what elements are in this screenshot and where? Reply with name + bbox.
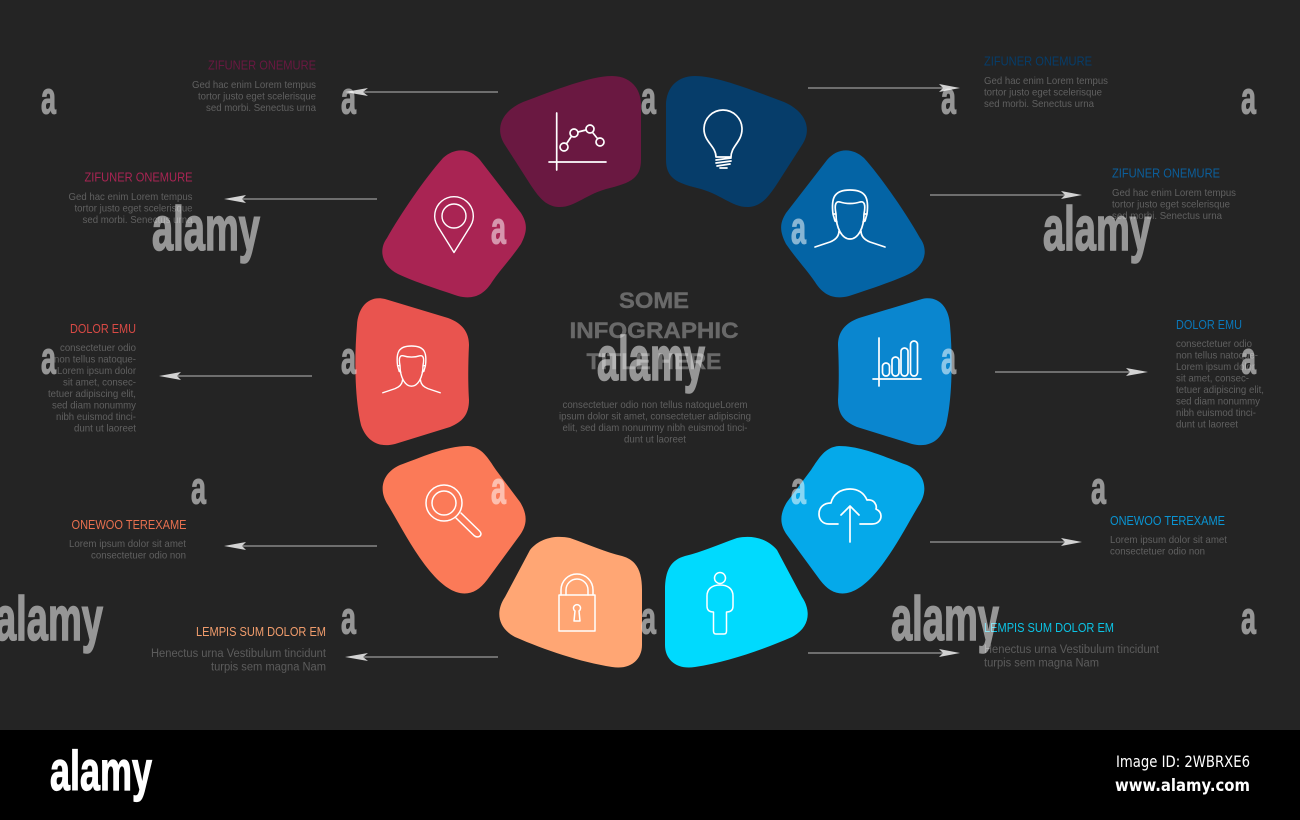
watermarks: small a: a [1241, 592, 1257, 644]
arrow: azure [995, 368, 1148, 376]
icon: bar chart [873, 338, 921, 386]
watermarks: small a: a [1241, 72, 1257, 124]
text block: navy: tortor justo eget scelerisque [984, 86, 1102, 98]
text block: azure: tetuer adipiscing elit, [1176, 384, 1264, 396]
text block: blue [1112, 166, 1236, 222]
watermarks: small a: a [341, 592, 357, 644]
text block: crimson [68, 170, 193, 226]
text block: azure: sed diam nonummy [1176, 396, 1261, 408]
icon: padlock [559, 574, 595, 631]
text block: navy [984, 54, 1108, 110]
text block: red: sit amet, consec- [63, 376, 136, 388]
title: INFOGRAPHIC [570, 318, 738, 343]
text block: red: non tellus natoque- [54, 354, 136, 366]
text block: azure: DOLOR EMU [1176, 318, 1242, 332]
text block: crimson: tortor justo eget scelerisque [74, 202, 193, 214]
text block: cyan: turpis sem magna Nam [984, 658, 1099, 670]
arrow: crimson [224, 195, 377, 203]
text block: red: nibh euismod tinci- [56, 411, 136, 423]
arrow: blue [930, 191, 1082, 199]
text block: sky blue [1110, 514, 1227, 558]
arrow: peach [345, 653, 498, 661]
text block: purple: Ged hac enim Lorem tempus [192, 79, 316, 91]
text block: azure: nibh euismod tinci- [1176, 407, 1256, 419]
icon: line chart [549, 113, 606, 170]
text block: peach: Henectus urna Vestibulum tincidunt [151, 648, 327, 660]
segment: azure bar chart [838, 298, 952, 445]
watermarks: small a: a [41, 72, 57, 124]
watermarks: small a: a [1241, 332, 1257, 384]
watermarks: large alamy: alamy [597, 325, 705, 394]
watermarks: small a: a [191, 462, 207, 514]
text block: peach: LEMPIS SUM DOLOR EM [196, 625, 326, 639]
segment: sky blue cloud [781, 446, 924, 594]
watermarks: large alamy [0, 195, 1151, 654]
text block: azure [1176, 318, 1264, 430]
watermarks: large alamy: alamy [1043, 195, 1151, 264]
center description: ipsum dolor sit amet, consectetuer adipiscing [559, 410, 751, 422]
watermarks: small a: a [491, 202, 507, 254]
text block: crimson: Ged hac enim Lorem tempus [68, 191, 192, 203]
text block: red [48, 322, 137, 434]
text block: crimson: sed morbi. Senectus urna [82, 214, 193, 226]
watermarks: large alamy: alamy [891, 585, 999, 654]
text block: azure: non tellus natoque- [1176, 350, 1258, 362]
watermarks: small a: a [491, 462, 507, 514]
arrow: purple [345, 88, 498, 96]
text block: purple: ZIFUNER ONEMURE [208, 58, 316, 72]
text block: peach: turpis sem magna Nam [211, 662, 326, 674]
title: TITLE HERE [586, 349, 722, 374]
icon: cloud upload [819, 489, 881, 542]
watermarks: small a: a [791, 462, 807, 514]
watermarks: small a: a [341, 72, 357, 124]
segment: cyan person [665, 537, 808, 668]
watermarks: small a [41, 72, 1257, 644]
text block: blue: Ged hac enim Lorem tempus [1112, 187, 1236, 199]
text block: red: Lorem ipsum dolor [57, 365, 136, 377]
text block: coral: ONEWOO TEREXAME [72, 518, 186, 532]
icon: man portrait [383, 346, 440, 393]
text block: red: dunt ut laoreet [74, 422, 136, 434]
text block: azure: sit amet, consec- [1176, 372, 1249, 384]
arrow: red [159, 372, 312, 380]
watermarks: small a: a [641, 72, 657, 124]
text block: cyan: Henectus urna Vestibulum tincidunt [984, 644, 1160, 656]
text block: coral [69, 518, 186, 562]
watermarks: small a: a [791, 202, 807, 254]
text block: sky blue: Lorem ipsum dolor sit amet [1110, 534, 1227, 546]
segment: red profile [355, 298, 469, 445]
center description: consectetuer odio non tellus natoqueLorem [562, 399, 748, 411]
text block: crimson: ZIFUNER ONEMURE [84, 170, 192, 184]
text block: coral: consectetuer odio non [91, 550, 186, 562]
text block: navy: ZIFUNER ONEMURE [984, 54, 1092, 68]
arrow: cyan [808, 649, 960, 657]
text block: cyan: LEMPIS SUM DOLOR EM [984, 621, 1114, 635]
text block: red: tetuer adipiscing elit, [48, 388, 136, 400]
icon: light bulb [704, 110, 742, 168]
watermarks: small a: a [941, 332, 957, 384]
watermarks: small a: a [41, 332, 57, 384]
watermarks: small a: a [341, 332, 357, 384]
text block: purple [192, 58, 316, 114]
watermarks: large alamy: alamy [152, 195, 260, 264]
watermarks: small a: a [1091, 462, 1107, 514]
text block: red: DOLOR EMU [70, 322, 136, 336]
text block: blue: ZIFUNER ONEMURE [1112, 166, 1220, 180]
text block: coral: Lorem ipsum dolor sit amet [69, 538, 186, 550]
text block: peach [151, 625, 327, 674]
segment: coral search [383, 446, 526, 594]
text block: blue: tortor justo eget scelerisque [1112, 198, 1230, 210]
icon: man portrait [815, 190, 885, 247]
segment: purple chart [500, 76, 641, 207]
title: SOME [619, 288, 689, 313]
segment: crimson location [382, 150, 526, 297]
segment: blue profile [781, 150, 925, 297]
text block: blue: sed morbi. Senectus urna [1112, 210, 1222, 222]
icon: standing person [707, 572, 733, 634]
watermarks: small a: a [641, 592, 657, 644]
text block: azure: dunt ut laoreet [1176, 418, 1238, 430]
footer logo: alamy [50, 739, 152, 802]
center description: elit, sed diam nonummy nibh euismod tinci- [562, 422, 748, 434]
segment: peach lock [499, 537, 642, 668]
title [570, 288, 738, 374]
website: www.alamy.com [1115, 776, 1250, 796]
text block: sky blue: ONEWOO TEREXAME [1110, 514, 1225, 528]
watermarks: small a: a [941, 72, 957, 124]
image id: Image ID: 2WBRXE6 [1116, 752, 1250, 771]
text block: navy: sed morbi. Senectus urna [984, 98, 1094, 110]
text block: azure: Lorem ipsum dolor [1176, 361, 1255, 373]
text block: red: sed diam nonummy [52, 400, 137, 412]
text block: purple: tortor justo eget scelerisque [198, 90, 316, 102]
icon: map pin [435, 197, 473, 252]
arrow: navy [808, 84, 960, 92]
text block: purple: sed morbi. Senectus urna [206, 102, 316, 114]
text block: cyan [984, 621, 1160, 670]
text block: red: consectetuer odio [60, 342, 136, 354]
watermarks: large alamy: alamy [0, 585, 103, 654]
footer bar [0, 730, 1300, 820]
text block: sky blue: consectetuer odio non [1110, 546, 1205, 558]
arrow: coral [224, 542, 377, 550]
segment: navy idea [666, 76, 807, 207]
center description [559, 399, 751, 446]
text block: navy: Ged hac enim Lorem tempus [984, 75, 1108, 87]
arrow: sky blue [930, 538, 1082, 546]
center description: dunt ut laoreet [624, 434, 686, 446]
icon: magnifying glass [426, 485, 481, 537]
text block: azure: consectetuer odio [1176, 338, 1252, 350]
